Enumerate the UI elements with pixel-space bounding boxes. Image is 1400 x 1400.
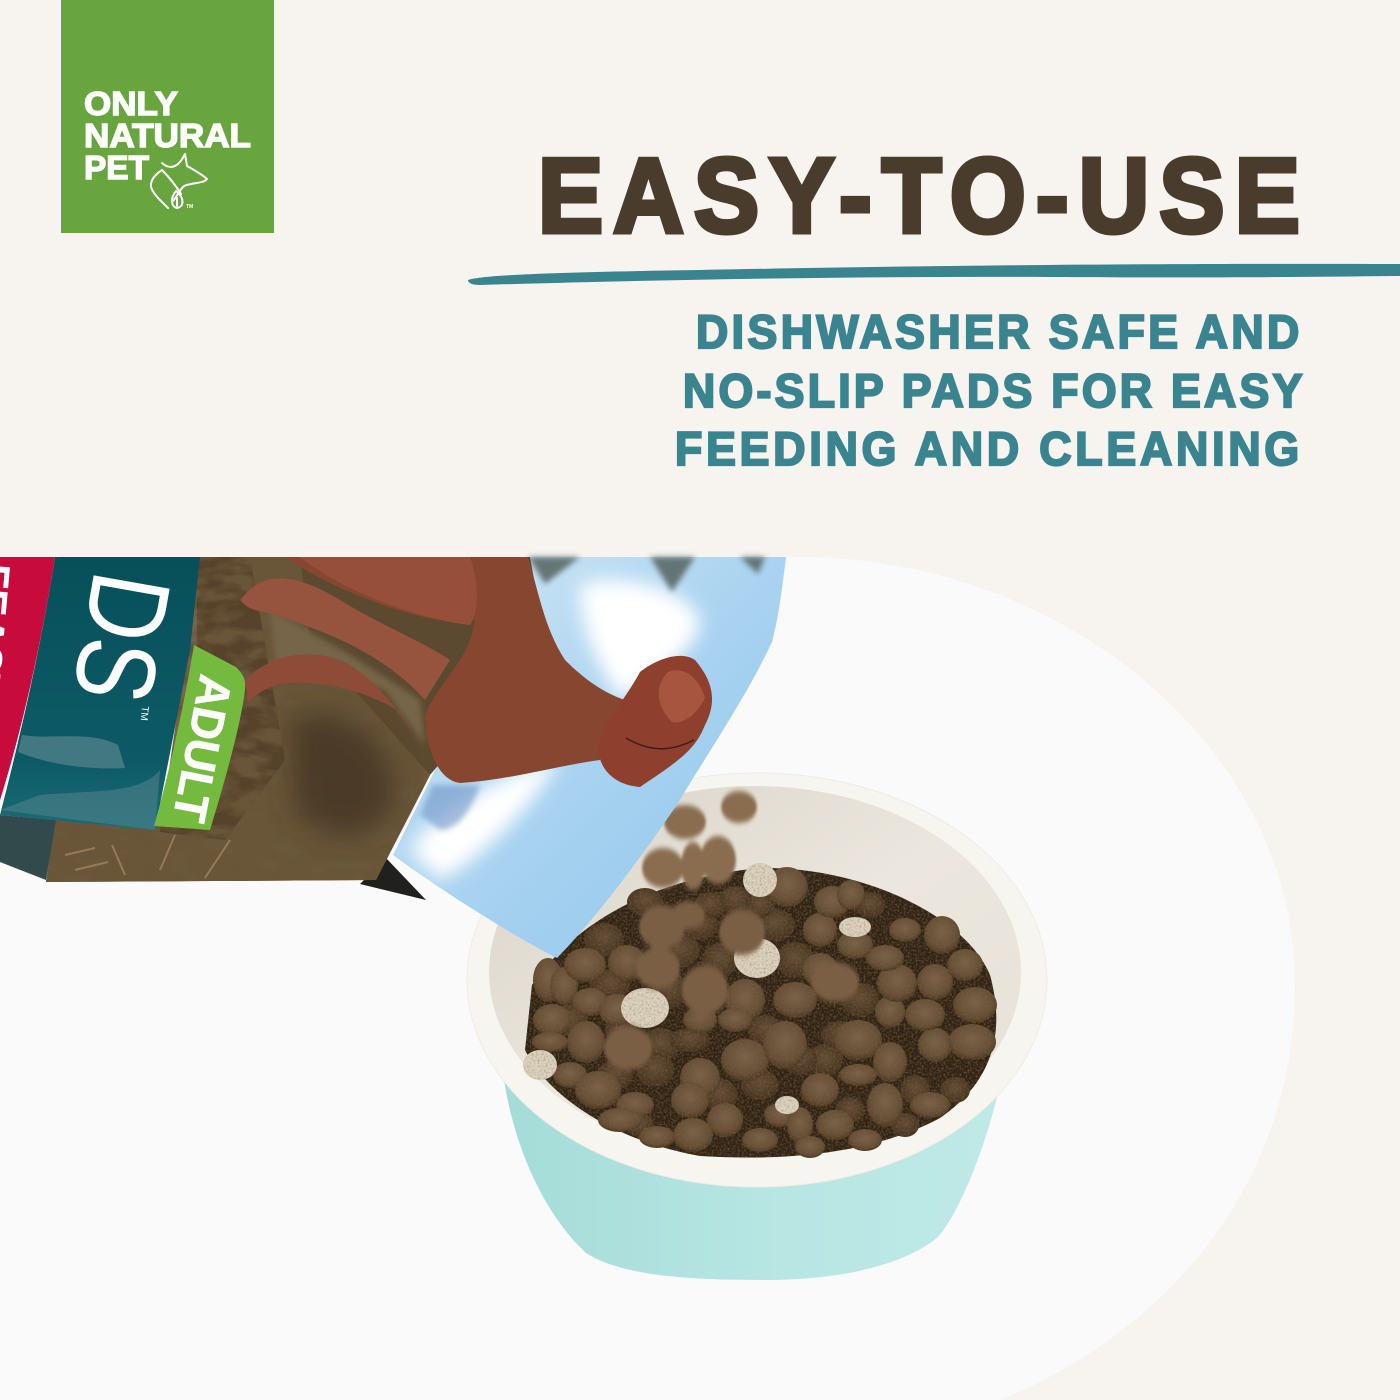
brush stroke divider [468, 264, 1400, 285]
logo icon: dog, cat and leaf [151, 154, 207, 208]
logo wordmark: PET [84, 149, 149, 186]
subtitle: NO-SLIP PADS FOR EASY [683, 365, 1302, 417]
bag: black gusset sliver [360, 858, 426, 900]
subtitle [675, 306, 1302, 475]
logo: Only Natural Pet [61, 0, 274, 233]
logo wordmark: NATURAL [84, 117, 251, 154]
back kibbles [552, 886, 970, 1137]
bag: tree print base [46, 557, 545, 882]
bag: trees at top [528, 557, 765, 592]
dog body shading [300, 557, 477, 625]
bowl [467, 773, 1047, 1280]
food bag [0, 557, 786, 958]
front kibbles [532, 867, 997, 1158]
logo trademark: TM [186, 204, 193, 210]
bag: dog illustration [240, 557, 712, 787]
white backdrop shape [0, 557, 1295, 1400]
title: EASY-TO-USE [538, 136, 1300, 255]
bag: dark strip [0, 815, 56, 880]
bag: teal label panel [0, 557, 200, 830]
bag: olive patch between legs [270, 610, 425, 745]
bag: teal label reflections [0, 735, 160, 830]
pale freeze-dried pieces [523, 863, 871, 1114]
logo wordmark: ONLY [84, 85, 178, 122]
bag: blue shadow near dog [420, 785, 480, 830]
bag: sky print [393, 557, 786, 958]
bowl rim [467, 773, 1047, 1187]
dog head [598, 656, 712, 787]
dog front leg [240, 578, 450, 700]
bag: trademark on label: TM [138, 706, 150, 721]
bag: dark bark side [160, 557, 285, 840]
bag: cloud highlights [410, 580, 700, 880]
logo wordmark [84, 85, 251, 186]
bag: bark streaks lower left [65, 835, 230, 878]
bag: tree bark print [46, 557, 430, 882]
bowl interior [489, 786, 1021, 1158]
bowl outer body [504, 1080, 1000, 1280]
subtitle: FEEDING AND CLEANING [675, 423, 1299, 475]
bag: DS lettering: DS [49, 564, 195, 711]
dog second leg [245, 654, 425, 750]
bag: dark trunk shadow [290, 714, 395, 835]
subtitle: DISHWASHER SAFE AND [696, 306, 1299, 358]
dog muzzle highlight [659, 670, 705, 722]
pile shadow base [525, 868, 996, 1157]
bag: ADULT green tab: ADULT [163, 671, 242, 826]
bag: red label band [0, 557, 55, 800]
dog body [285, 557, 625, 783]
kibble pile [523, 863, 997, 1158]
falling kibble [604, 791, 859, 1070]
